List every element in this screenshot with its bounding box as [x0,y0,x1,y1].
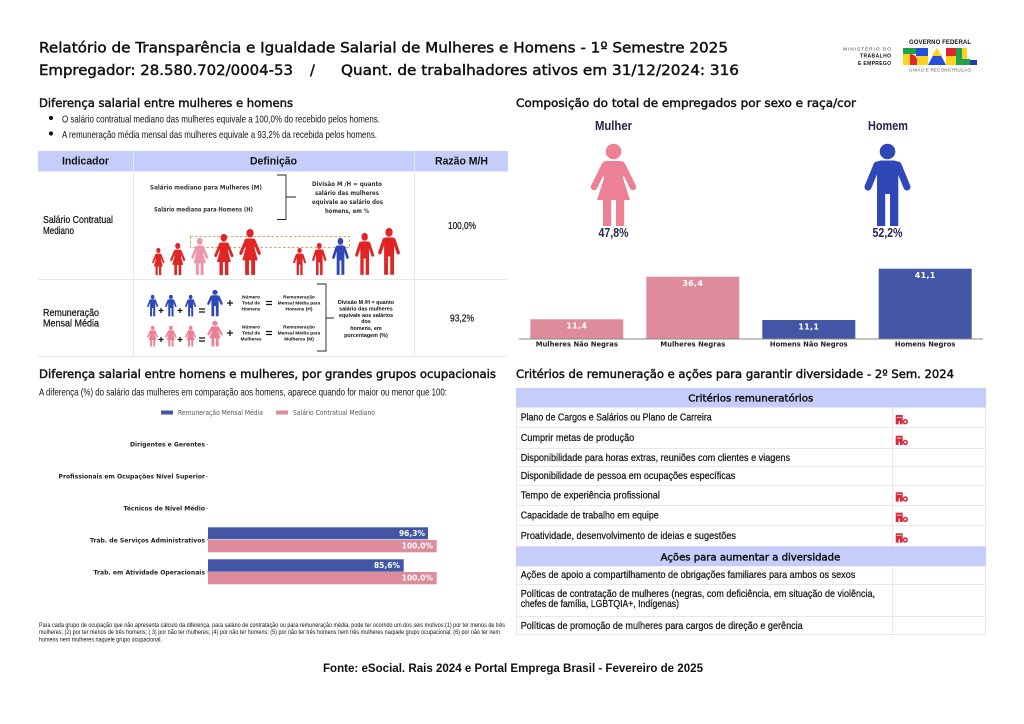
heading: diferença salarial: Diferença salarial entre mulheres e homens [39,96,293,110]
bar chart: diferença por grupo: 85,6% [374,561,400,570]
legend: Remuneração Mensal Média [178,409,263,417]
table: critérios e ações: Critérios remuneratórios [688,392,813,404]
label: homem: Homem [868,119,908,133]
bar chart: diferença por grupo: 96,3% [399,529,425,538]
bar chart: diferença por grupo: Trab. de Serviços Administrativos [90,536,205,544]
diagram: remuneração mensal média: Mensal Média para [278,330,321,336]
table: critérios e ações: chefes de família, LGBTQIA+, Indígenas) [521,598,679,610]
panel: diferença salarial [38,96,508,357]
table: critérios e ações: Políticas de promoção de mulheres para cargos de direção e gerência [521,620,803,632]
heading: composição: Composição do total de empregados por sexo e raça/cor [516,96,856,110]
diagram: remuneração mensal média: Mulheres [240,336,262,342]
table: indicadores: Indicador [62,156,110,168]
table: indicadores: Mediano [43,225,74,237]
bar chart: diferença por grupo: Dirigentes e Gerentes [130,440,205,448]
logo: Governo Federal Brasil: GOVERNO FEDERAL [909,40,971,46]
legend: Salário Contratual Mediano [293,409,375,417]
bullet list: A remuneração média mensal das mulheres equivale a 93,2% da recebida pelos homens. [62,129,377,141]
bar chart: sexo e raça: 36,4 [682,279,703,288]
footnote: homens nem mulheres naquele grupo ocupacional. [39,636,162,644]
icon: mulher [594,144,633,226]
diagram: remuneração mensal média: Homens (H) [286,306,313,312]
bullet list: O salário contratual mediano das mulheres equivale a 100,0% do recebido pelos homens. [62,114,380,126]
table: critérios e ações: Ações de apoio a compartilhamento de obrigações familiares para ambos os sexos [521,569,855,581]
footnote: mulheres; (2) por ter menos de três homens; ( 3) por não ter mulheres; (4) por não ter homens; (5) por não ter três homens nem três mulheres naquele grupo ocupacional; (6) por não ter nem [39,629,500,636]
bar chart: sexo e raça: Homens Negros [895,340,955,348]
icon: marca row 7 [896,533,907,543]
table: critérios e ações: Cumprir metas de produção [521,432,634,444]
panel: composição [516,96,983,348]
table: indicadores: 93,2% [450,312,474,324]
diagram: salário contratual mediano: equivale ao salário dos [312,198,383,206]
legend [161,409,375,417]
diagram: remuneração mensal média: Mulheres (M) [284,336,314,342]
logo: Ministério do Trabalho e Emprego: E EMPREGO [858,61,891,67]
diagram: remuneração mensal média: Número [242,324,260,330]
diagram: remuneração mensal média: dos [361,319,371,325]
table: critérios e ações: Capacidade de trabalho em equipe [521,510,659,522]
icon: marca row 1 [896,415,907,424]
title: Quant. de trabalhadores ativos em 31/12/2024: 316 [341,63,739,79]
diagram: remuneração mensal média: Total de [242,300,260,306]
icon: marca row 2 [896,436,907,445]
table: critérios e ações: Tempo de experiência profissional [521,490,660,502]
diagram: salário contratual mediano: homens, em % [325,207,369,215]
bar chart: sexo e raça [519,269,983,348]
diagram: remuneração mensal média: Total de [242,330,260,336]
source: Fonte: eSocial. Rais 2024 e Portal Emprega Brasil - Fevereiro de 2025 [323,661,703,675]
logo: Ministério do Trabalho e Emprego: MINISTÉRIO DO [843,46,891,52]
table: critérios e ações [516,388,986,635]
logo: Ministério do Trabalho e Emprego [843,46,891,67]
title: / [310,63,315,79]
table: indicadores: 100,0% [448,220,476,232]
table: critérios e ações: Disponibilidade de pessoa em ocupações específicas [521,470,735,482]
diagram: remuneração mensal média: Remuneração [283,324,315,330]
bar chart: diferença por grupo: 100,0% [402,574,433,583]
table: indicadores: Remuneração [43,307,99,319]
bar chart: diferença por grupo [58,440,437,584]
value: 52,2%: 52,2% [872,226,902,240]
bar chart: diferença por grupo: Trab. em Atividade Operacionais [94,568,205,576]
bar chart: sexo e raça: Mulheres Não Negras [536,340,618,348]
icon: homem [868,144,907,226]
table: indicadores: Razão M/H [435,156,488,168]
bullet list [49,114,380,141]
bar chart: sexo e raça: 11,1 [798,322,819,332]
value: 47,8%: 47,8% [598,226,628,240]
table: indicadores: Salário Contratual [43,214,113,226]
table: indicadores [38,151,508,357]
diagram: remuneração mensal média: equivale aos salários [339,313,393,319]
panel: grupos ocupacionais [39,367,506,644]
diagram: remuneração mensal média: homens, em [350,326,382,332]
footnote [39,622,506,644]
diagram: remuneração mensal média: Divisão M /H = quanto [338,300,395,306]
title: Empregador: 28.580.702/0004-53 [39,63,293,79]
diagram: remuneração mensal média: salário das mulheres [339,306,393,312]
diagram: salário contratual mediano: Divisão M /H = quanto [312,180,382,188]
bar chart: diferença por grupo: 100,0% [402,542,433,551]
diagram: salário contratual mediano: salário das mulheres [315,189,379,197]
diagram: salário contratual mediano [150,175,398,275]
logo: Governo Federal Brasil [903,40,977,72]
bar chart: sexo e raça: Mulheres Negras [660,340,725,348]
diagram: salário contratual mediano: Salário mediano para Mulheres (M) [150,184,262,192]
heading: grupos ocupacionais: Diferença salarial entre homens e mulheres, por grandes grupos ocupacionais [39,367,496,381]
bar chart: diferença por grupo: Técnicos de Nível Médio [124,504,205,512]
panel: critérios e ações [516,367,986,635]
logo: Governo Federal Brasil: UNIÃO E RECONSTRUÇÃO [909,66,971,72]
title [39,40,739,79]
table: critérios e ações: Proatividade, desenvolvimento de ideias e sugestões [521,530,736,542]
bar chart: sexo e raça: Homens Não Negros [770,340,848,348]
diagram: salário contratual mediano: Salário mediano para Homens (H) [154,206,253,214]
diagram: remuneração mensal média [148,284,395,351]
diagram: remuneração mensal média: Número [242,294,260,300]
title: Relatório de Transparência e Igualdade Salarial de Mulheres e Homens - 1º Semestre 2025 [39,40,728,56]
bar chart: sexo e raça: 41,1 [915,271,936,280]
table: indicadores: Definição [250,156,297,168]
icon: marca row 5 [896,492,907,502]
table: indicadores: Mensal Média [43,318,99,330]
diagram: remuneração mensal média: porcentagem (%) [344,333,388,339]
table: critérios e ações: Ações para aumentar a diversidade [661,552,840,564]
footnote: Para cada grupo de ocupação que não apresenta cálculo da diferença, para salário de contratação ou para remuneração média, pode ter ocorrido um dos seis motivos:(1) por ter menos de três [39,622,506,629]
icon: marca row 6 [896,513,907,522]
diagram: remuneração mensal média: Remuneração [283,294,315,300]
table: critérios e ações: Políticas de contratação de mulheres (negras, com deficiência, em situação de violência, [521,588,875,600]
table: critérios e ações: Plano de Cargos e Salários ou Plano de Carreira [521,412,712,424]
bar chart: sexo e raça: 11,4 [566,322,587,330]
bar chart: diferença por grupo: Profissionais em Ocupações Nível Superior [58,472,206,480]
label: mulher: Mulher [595,119,632,133]
subtitle: A diferença (%) do salário das mulheres em comparação aos homens, aparece quando for maior ou menor que 100: [39,386,447,398]
logo: Ministério do Trabalho e Emprego: TRABALHO [860,54,891,60]
diagram: remuneração mensal média: Mensal Média para [278,300,321,306]
table: critérios e ações: Disponibilidade para horas extras, reuniões com clientes e viagens [521,452,790,464]
heading: critérios: Critérios de remuneração e ações para garantir diversidade - 2º Sem. 2024 [516,367,954,381]
diagram: remuneração mensal média: Homens [242,306,261,312]
